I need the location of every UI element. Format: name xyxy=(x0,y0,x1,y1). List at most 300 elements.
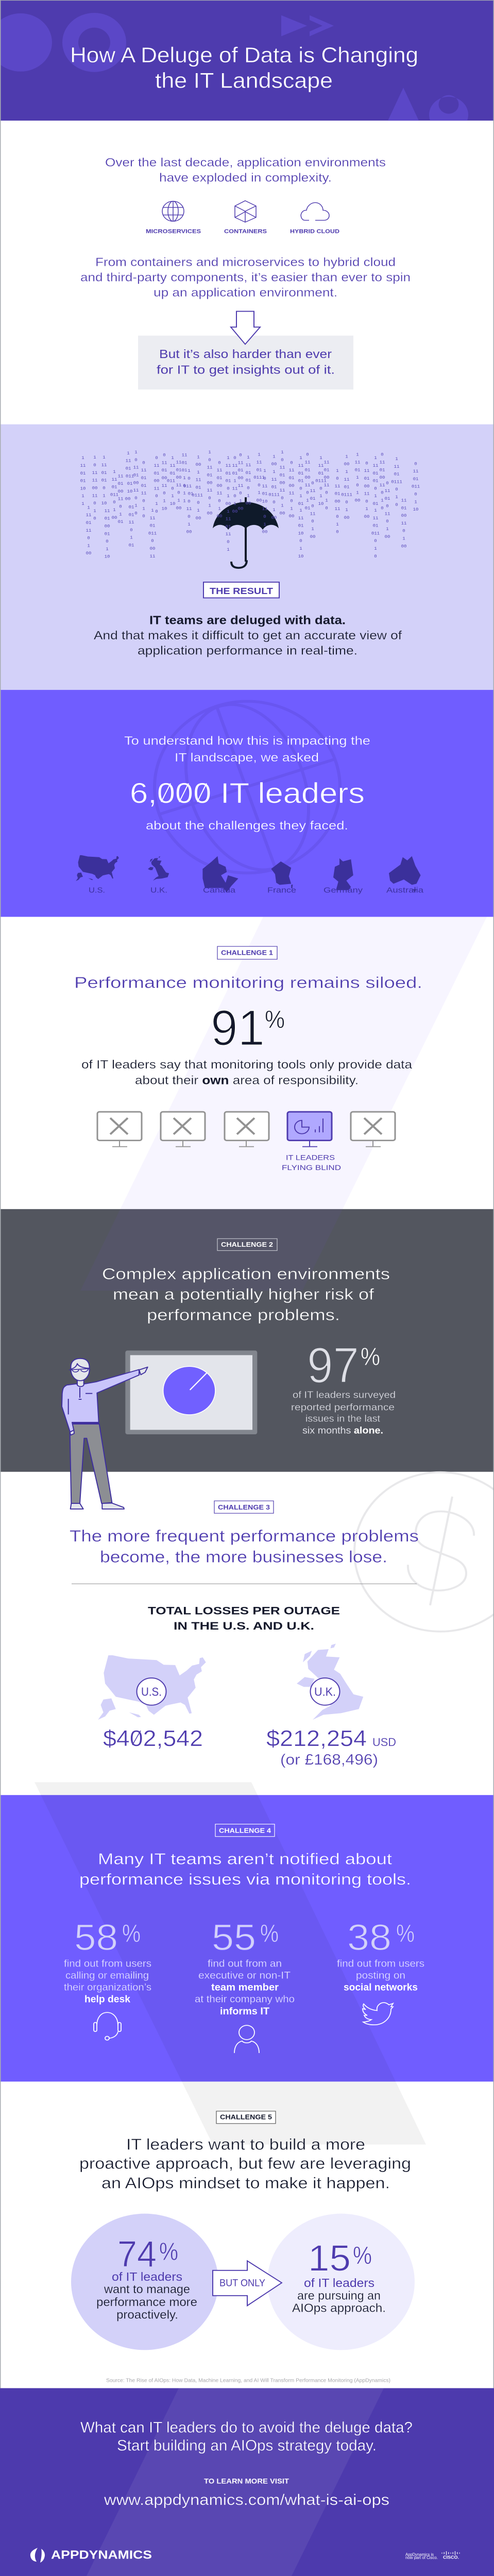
callout box: for IT to get insights out of it. xyxy=(157,363,335,377)
panel: challenge 5 xyxy=(71,2111,415,2383)
binary data rain: 1 xyxy=(336,468,339,473)
binary data rain: 11 xyxy=(335,506,340,512)
glasses xyxy=(69,1369,89,1372)
panel: intro on application complexity xyxy=(80,156,411,389)
binary data rain: 0 xyxy=(414,462,417,466)
binary data rain: 11 xyxy=(186,506,192,512)
binary data rain: 0 xyxy=(263,514,266,519)
binary data rain: 00 xyxy=(305,475,310,480)
binary data rain: 01 xyxy=(373,471,378,476)
neck xyxy=(77,1380,84,1386)
heading: Performance monitoring remains siloed. xyxy=(74,974,422,991)
heading: an AIOps mindset to make it happen. xyxy=(101,2174,390,2192)
binary data rain: 0 xyxy=(233,494,236,499)
binary data rain: 01 xyxy=(344,485,349,490)
binary data rain: 0 xyxy=(163,453,166,458)
hair xyxy=(71,1359,90,1369)
icon: France map xyxy=(271,861,293,889)
binary data rain: 0 xyxy=(356,483,359,488)
binary data rain: 11 xyxy=(257,460,262,465)
binary data rain: 1 xyxy=(127,451,130,456)
binary data rain: 01 xyxy=(257,468,262,472)
binary data rain: 0 xyxy=(336,514,339,519)
binary data rain: 01 xyxy=(101,478,107,483)
icon: U.S. map xyxy=(76,855,119,881)
icon labels: CONTAINERS xyxy=(224,229,267,234)
globe watermark xyxy=(155,690,340,884)
binary data rain: 11 xyxy=(289,468,294,473)
binary data rain: 0 xyxy=(188,476,191,481)
binary data rain: 1 xyxy=(233,479,236,483)
binary data rain: 01 xyxy=(394,472,399,477)
binary data rain: 0 xyxy=(119,504,122,509)
monitor label: FLYING BLIND xyxy=(282,1163,341,1172)
binary data rain: 00 xyxy=(196,516,201,521)
binary data rain: 0 xyxy=(171,486,174,491)
binary data rain: 01 xyxy=(80,479,86,483)
binary data rain: 0 xyxy=(263,476,266,481)
binary data rain: 01 xyxy=(298,501,303,506)
binary data rain: 1 xyxy=(183,499,186,503)
Cisco note: CISCO. xyxy=(443,2555,459,2560)
binary data rain: 11 xyxy=(232,463,237,468)
binary data rain: 1 xyxy=(325,498,328,503)
binary data rain: 11 xyxy=(176,460,181,465)
binary data rain: 11 xyxy=(86,528,91,533)
heading: performance issues via monitoring tools. xyxy=(79,1870,411,1888)
binary data rain: 0 xyxy=(290,499,293,503)
binary data rain: 01 xyxy=(262,492,267,496)
binary data rain: 0 xyxy=(386,504,389,509)
icon: dollar coin watermark xyxy=(354,1472,494,1632)
result text: IT teams are deluged with data. xyxy=(149,614,346,627)
binary data rain: 11 xyxy=(226,532,231,537)
heading xyxy=(102,1265,390,1324)
U.K. loss amount xyxy=(266,1725,396,1768)
binary data rain: 011 xyxy=(148,531,157,536)
binary data rain: 011 xyxy=(110,493,118,497)
binary data rain: 00 xyxy=(401,513,406,518)
binary data rain: 1 xyxy=(239,499,242,503)
monitor label xyxy=(282,1154,341,1172)
binary data rain: 11 xyxy=(141,468,146,473)
binary data rain: 0 xyxy=(299,538,302,544)
binary data rain: 01 xyxy=(118,519,123,524)
circle: 74% stat: % xyxy=(159,2238,178,2265)
binary data rain: 11 xyxy=(318,463,323,468)
binary data rain: 1 xyxy=(311,527,314,532)
binary data rain: 01 xyxy=(298,471,303,476)
icon: Germany map xyxy=(333,858,353,890)
binary data rain: 11 xyxy=(129,520,134,525)
Cisco note: now part of Cisco. xyxy=(405,2555,438,2560)
icon labels: MICROSERVICES xyxy=(146,229,201,234)
shoes xyxy=(71,1503,83,1509)
stat description: of IT leaders surveyed xyxy=(293,1390,396,1400)
section background: challenge 2 xyxy=(0,1209,494,1472)
binary data rain: 00 xyxy=(289,514,294,519)
binary data rain: 11 xyxy=(401,498,406,503)
callout box: But it’s also harder than ever xyxy=(159,348,332,361)
binary data rain: 11 xyxy=(413,469,418,474)
pie chart xyxy=(163,1366,215,1415)
binary data rain: 01 xyxy=(232,471,237,476)
binary data rain: 0 xyxy=(106,539,109,544)
binary data rain: 0 xyxy=(311,504,314,509)
stat description xyxy=(291,1390,396,1436)
binary data rain: 11 xyxy=(141,491,146,496)
binary data rain: 0 xyxy=(381,506,384,511)
binary data rain: 0 xyxy=(386,519,389,524)
paragraph: and third-party components, it’s easier than ever to spin xyxy=(80,271,411,284)
binary data rain: 0 xyxy=(381,452,384,457)
binary data rain: 11 xyxy=(207,465,212,470)
panel: challenge 2 xyxy=(102,1239,396,1436)
binary data rain: 11 xyxy=(262,506,267,512)
binary data rain: 0 xyxy=(247,486,250,490)
binary data rain: 1 xyxy=(197,455,200,460)
circle: 15% stat: 15 xyxy=(308,2238,351,2279)
binary data rain: 0 xyxy=(381,490,384,496)
binary data rain: 1 xyxy=(299,455,302,461)
stat column: social networks: posting on xyxy=(356,1970,405,1981)
Cisco note xyxy=(405,2551,459,2560)
binary data rain: 1 xyxy=(197,470,200,475)
binary data rain: 1 xyxy=(281,450,284,455)
binary data rain: 1 xyxy=(263,468,266,473)
binary data rain: 00 xyxy=(324,475,329,480)
survey text: 6,000 IT leaders xyxy=(130,777,365,809)
challenge 1 badge xyxy=(217,946,277,959)
binary data rain: 1 xyxy=(81,501,84,506)
stat column: team member: % xyxy=(260,1920,279,1947)
binary data rain: 0 xyxy=(290,461,293,465)
binary data rain: 1 xyxy=(183,476,186,481)
binary data rain: 0111 xyxy=(268,493,280,497)
binary data rain: 1 xyxy=(188,522,191,527)
binary data rain: 11 xyxy=(118,497,123,502)
stat description: six months alone. xyxy=(302,1426,383,1436)
binary data rain: 0 xyxy=(365,461,368,466)
binary data rain: 11 xyxy=(92,478,97,483)
icon: headset xyxy=(94,2012,121,2040)
circle: 74% stat xyxy=(71,2214,218,2350)
binary data rain: 1 xyxy=(272,454,276,459)
binary data rain: 11 xyxy=(335,484,340,489)
binary data rain: 01 xyxy=(154,471,159,476)
binary data rain: 00 xyxy=(196,462,201,467)
binary data rain: 11 xyxy=(154,486,159,491)
binary data rain: 01 xyxy=(129,543,134,548)
binary data rain: 11 xyxy=(176,483,181,488)
binary data rain: 1 xyxy=(365,506,368,512)
binary data rain: 11 xyxy=(289,491,294,496)
binary data rain: 1 xyxy=(299,546,302,551)
circle: 74% stat: of IT leaders xyxy=(112,2270,182,2284)
binary data rain: 01 xyxy=(182,468,187,473)
binary data rain: 1 xyxy=(87,505,90,510)
diagonal band behind challenge 4 and 5 xyxy=(35,1782,426,2145)
binary data rain: 01 xyxy=(176,468,181,472)
country labels: France xyxy=(267,886,296,894)
binary data rain: 0 xyxy=(306,490,309,496)
circle: 74% stat: performance more xyxy=(96,2296,197,2309)
binary data rain: 11 xyxy=(226,463,231,468)
binary data rain: 01 xyxy=(310,496,315,501)
icon: monitor with X xyxy=(97,1112,142,1147)
binary data rain: 00 xyxy=(364,514,369,519)
call to action text: Start building an AIOps strategy today. xyxy=(117,2437,377,2454)
binary data rain: 11 xyxy=(298,516,303,521)
stat column: social networks xyxy=(337,1917,424,2025)
binary data rain: 1 xyxy=(81,455,84,461)
binary data rain: 01 xyxy=(141,476,146,481)
icon: monitor with X xyxy=(225,1112,269,1147)
binary data rain: 1 xyxy=(356,475,359,480)
AppDynamics logo: APPDYNAMICS xyxy=(51,2549,152,2562)
binary data rain: 11 xyxy=(385,512,390,516)
country labels: U.S. xyxy=(89,886,105,894)
icon: cube containers xyxy=(235,201,256,222)
binary data rain: 1 xyxy=(299,508,302,513)
shirt details xyxy=(69,1387,92,1414)
binary data rain: 1 xyxy=(374,455,377,461)
binary data rain: 0 xyxy=(177,490,180,496)
binary data rain: 00 xyxy=(186,530,192,534)
binary data rain: 01 xyxy=(188,492,193,496)
binary data rain: 00 xyxy=(238,476,243,481)
country labels xyxy=(89,886,424,894)
binary data rain: 0 xyxy=(218,499,221,503)
binary data rain: 0 xyxy=(227,539,230,545)
binary data rain: 11 xyxy=(133,488,139,493)
footer background xyxy=(0,2388,494,2576)
binary data rain: 1 xyxy=(171,455,174,461)
binary data rain: 10 xyxy=(101,501,107,506)
panel: survey of 6,000 IT leaders xyxy=(76,690,424,894)
binary data rain: 00 xyxy=(133,481,139,485)
binary data rain: 0 xyxy=(239,491,242,496)
binary data rain: 1 xyxy=(103,455,106,460)
binary data rain: 0 xyxy=(227,486,230,491)
intro text: Over the last decade, application environments xyxy=(105,156,386,170)
binary data rain: 11 xyxy=(310,488,315,494)
binary data rain: 1 xyxy=(134,503,138,509)
binary data rain: 01 xyxy=(355,468,360,472)
binary data rain: 00 xyxy=(92,486,97,490)
binary data rain: 0111 xyxy=(192,493,203,498)
binary data rain: 00 xyxy=(105,524,110,529)
binary data rain: 1 xyxy=(386,527,389,532)
binary data rain: 01 xyxy=(182,461,187,465)
binary data rain: 0 xyxy=(374,486,377,491)
binary data rain: 10 xyxy=(105,554,110,560)
U.K. map with badge: U.K. xyxy=(314,1686,336,1699)
icon: monitor with X xyxy=(351,1112,395,1147)
binary data rain: 11 xyxy=(364,468,369,473)
binary data rain: 1 xyxy=(177,498,180,503)
heading xyxy=(70,1527,419,1566)
stat column: social networks: social networks xyxy=(344,1982,418,1993)
binary data rain: 00 xyxy=(154,479,159,483)
binary data rain: 0 xyxy=(93,516,96,521)
binary data rain: 0111 xyxy=(391,480,402,484)
binary data rain: 0 xyxy=(311,519,314,524)
stat column: help desk: calling or emailing xyxy=(65,1970,149,1981)
binary data rain: 11 xyxy=(280,465,285,470)
binary data rain: 1 xyxy=(336,522,339,527)
diagonal band in footer xyxy=(87,2388,384,2576)
binary data rain: 1 xyxy=(272,507,276,513)
binary data rain: 01 xyxy=(373,523,378,528)
binary data rain: 11 xyxy=(118,474,123,479)
result text: And that makes it difficult to get an accurate view of xyxy=(94,629,402,642)
binary data rain: 01 xyxy=(324,468,329,472)
binary data rain: 0 xyxy=(402,529,405,534)
binary data rain: 1 xyxy=(374,508,377,513)
binary data rain: 1 xyxy=(155,501,158,506)
heading: Many IT teams aren’t notified about xyxy=(98,1850,392,1868)
binary data rain: 0 xyxy=(325,506,328,511)
binary data rain: 10 xyxy=(413,507,418,512)
binary data rain: 0 xyxy=(233,455,236,461)
result text xyxy=(94,614,402,657)
arrow: down xyxy=(231,311,260,344)
binary data rain: 1 xyxy=(171,494,174,499)
binary data rain: 011 xyxy=(126,474,134,479)
binary data rain: 1 xyxy=(134,450,138,455)
binary data rain: 1 xyxy=(87,544,90,548)
stat column: team member: team member xyxy=(211,1982,279,1993)
U.K. loss amount: USD xyxy=(372,1736,396,1749)
binary data rain: 11 xyxy=(238,483,243,488)
survey text: about the challenges they faced. xyxy=(146,819,348,833)
Cisco note: AppDynamics is xyxy=(405,2552,434,2557)
binary data rain: 1 xyxy=(188,468,191,473)
binary data rain: 0 xyxy=(325,490,328,496)
binary data rain: 00 xyxy=(86,551,91,556)
diagonal band behind challenge 1 and 2 xyxy=(80,917,487,1291)
binary data rain: 00 xyxy=(246,501,251,506)
binary data rain: 00 xyxy=(176,475,181,480)
binary data rain: 01 xyxy=(112,485,117,490)
binary data rain: 01 xyxy=(207,473,212,478)
binary data rain: 01 xyxy=(129,505,134,510)
header panel xyxy=(0,0,494,121)
binary data rain: 00 xyxy=(150,546,155,551)
binary data rain: 00 xyxy=(289,483,294,488)
panel: challenge 3 xyxy=(70,1472,494,1768)
heading xyxy=(79,1850,411,1888)
binary data rain: 00 xyxy=(380,475,385,480)
binary data rain xyxy=(80,450,420,560)
binary data rain: 1 xyxy=(272,469,276,474)
binary data rain: 01 xyxy=(401,506,406,511)
title xyxy=(70,44,418,93)
shirt and arms xyxy=(62,1369,139,1432)
binary data rain: 1 xyxy=(345,454,348,459)
stat column: team member xyxy=(195,1917,295,2053)
circle: 15% stat: AIOps approach. xyxy=(292,2301,386,2315)
challenge 3 badge xyxy=(214,1501,274,1513)
subheading: total losses xyxy=(148,1604,340,1632)
section background: lavender result band xyxy=(0,425,494,690)
stat description: of IT leaders say that monitoring tools only provide data xyxy=(81,1058,413,1072)
binary data rain: 0 xyxy=(365,499,368,504)
binary data rain: 11 xyxy=(344,477,349,482)
binary data rain: 1 xyxy=(218,506,221,511)
binary data rain: 00 xyxy=(217,514,222,519)
binary data rain: 1 xyxy=(247,494,250,498)
binary data rain: 11 xyxy=(271,477,277,482)
circle: 15% stat: % xyxy=(353,2242,372,2269)
binary data rain: 0 xyxy=(319,486,322,491)
binary data rain: 10 xyxy=(170,501,175,506)
stat column: team member: 55 xyxy=(212,1917,256,1958)
stat: 97%: 97 xyxy=(307,1337,359,1394)
binary data rain: 01 xyxy=(126,466,131,471)
challenge 1 badge: CHALLENGE 1 xyxy=(221,949,273,956)
header decorative shapes xyxy=(0,13,468,121)
U.K. loss amount: (or £168,496) xyxy=(280,1752,378,1768)
binary data rain: 1 xyxy=(374,546,377,551)
intro text: have exploded in complexity. xyxy=(159,171,332,184)
binary data rain: 11 xyxy=(92,494,97,498)
panel: challenge 1 xyxy=(74,946,422,1172)
source note: Source: The Rise of AIOps: How Data, Machine Learning, and AI Will Transform Performance Monitoring (AppDynamics) xyxy=(106,2378,390,2383)
stat column: help desk: 58 xyxy=(74,1917,118,1958)
binary data rain: 11 xyxy=(162,461,167,465)
stat column: help desk xyxy=(64,1917,151,2040)
heading: proactive approach, but few are leveraging xyxy=(79,2155,411,2172)
binary data rain: 1 xyxy=(227,494,230,499)
binary data rain: 0 xyxy=(374,554,377,559)
binary data rain: 0 xyxy=(281,457,284,463)
binary data rain: 0 xyxy=(299,486,302,491)
binary data rain: 01 xyxy=(86,520,91,526)
country labels: U.K. xyxy=(150,886,167,894)
binary data rain: 0111 xyxy=(315,479,327,483)
challenge 3 badge: CHALLENGE 3 xyxy=(218,1503,270,1511)
binary data rain: 0 xyxy=(155,455,158,461)
binary data rain: 0 xyxy=(93,501,96,506)
binary data rain: 01 xyxy=(373,479,378,483)
binary data rain: 01 xyxy=(141,483,146,488)
binary data rain: 0 xyxy=(306,452,309,457)
heading xyxy=(79,2136,411,2192)
binary data rain: 01 xyxy=(127,481,132,486)
binary data rain: 1 xyxy=(345,507,348,513)
binary data rain: 01 xyxy=(105,532,110,536)
binary data rain: 01 xyxy=(271,485,277,490)
binary data rain: 1 xyxy=(183,491,186,496)
binary data rain: 11 xyxy=(246,463,251,468)
binary data rain: 1 xyxy=(263,522,266,527)
binary data rain: 1 xyxy=(119,512,122,517)
binary data rain: 1 xyxy=(290,506,293,511)
binary data rain: 00 xyxy=(271,462,277,467)
binary data rain: 01 xyxy=(305,468,310,472)
binary data rain: 1 xyxy=(227,547,230,552)
binary data rain: 11 xyxy=(133,465,139,470)
binary data rain: 1 xyxy=(113,469,116,474)
binary data rain: 10 xyxy=(262,499,267,504)
stat description xyxy=(81,1058,413,1087)
head xyxy=(71,1359,90,1381)
binary data rain: 01 xyxy=(133,473,139,478)
binary data rain: 00 xyxy=(271,515,277,520)
binary data rain: 00 xyxy=(118,489,123,494)
